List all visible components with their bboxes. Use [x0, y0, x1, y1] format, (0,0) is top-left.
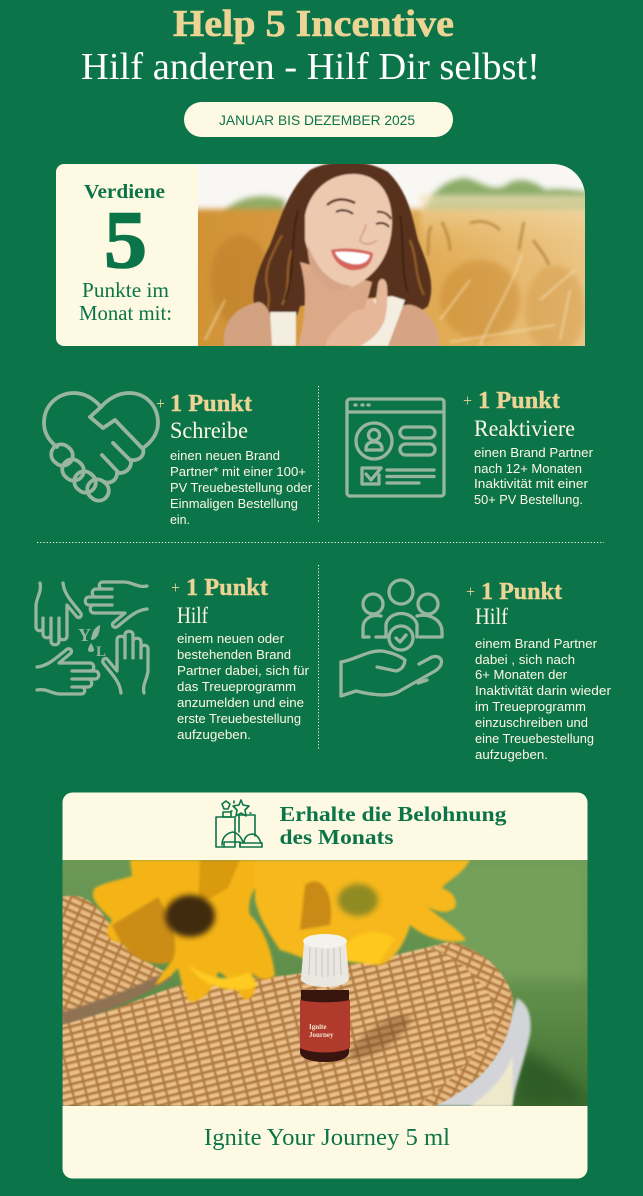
text: description: im Treueprogramm: [475, 699, 586, 714]
icon: people above open hand: [341, 580, 442, 696]
basket lid: left part: [62, 896, 172, 1025]
title: Help 5 Incentive: [173, 3, 454, 45]
text: description: anzumelden und eine: [177, 695, 304, 710]
text: description: einen neuen Brand: [170, 448, 280, 463]
text: description: [474, 445, 594, 507]
text: description: Inaktivität darin wieder: [475, 683, 612, 698]
face: [305, 174, 392, 288]
heading: reward of the month: [280, 802, 507, 849]
text: description: [475, 636, 612, 762]
hand: [325, 279, 387, 346]
points label: +: [156, 394, 165, 413]
neck and chest: [298, 262, 372, 346]
text: description: bestehenden Brand: [177, 647, 291, 662]
heading: Verdiene: Verdiene: [84, 181, 165, 203]
heading: Schreibe: Schreibe: [170, 418, 248, 443]
eyebrows and eyes: [327, 199, 355, 205]
points label: 1 Punkt: [481, 579, 562, 605]
icon: handshake heart: [44, 393, 158, 505]
icon: gifts and stars: [216, 800, 262, 847]
item: reactivate brand partner: [347, 388, 594, 507]
text: Punkte im Monat mit: Punkte im: [82, 278, 169, 302]
text: description: ein.: [170, 512, 190, 527]
points label: 1 Punkt: [170, 391, 252, 417]
text: description: Partner dabei, sich für: [177, 663, 310, 678]
points label: +: [466, 582, 475, 601]
bottle: [300, 934, 350, 1062]
shoulders: [224, 302, 273, 346]
dress: [270, 312, 296, 346]
date pill: JANUAR BIS DEZEMBER 2025: [219, 112, 415, 128]
bottle: Journey: [309, 1031, 334, 1039]
points label: 1 Punkt: [186, 575, 268, 601]
text: Punkte im Monat mit: [79, 278, 172, 325]
heading: Hilf: Hilf: [475, 604, 508, 629]
points label: 1 Punkt: [478, 388, 560, 414]
text: description: PV Treuebestellung oder: [170, 480, 313, 495]
text: description: dabei , sich nach: [475, 652, 575, 667]
hair: [254, 162, 431, 327]
bottle: Ignite: [309, 1023, 326, 1031]
text: description: das Treueprogramm: [177, 679, 296, 694]
panel: earn 5 points hero: [56, 164, 585, 346]
text: description: Einmaligen Bestellung: [170, 496, 298, 511]
subtitle: Hilf anderen - Hilf Dir selbst!: [81, 46, 540, 88]
product name: Ignite Your Journey 5 ml: [204, 1125, 450, 1151]
icon: four hands with logo: L: [96, 644, 106, 660]
basket lid: front part: [62, 942, 513, 1106]
mouth: [331, 249, 373, 270]
text: description: [170, 448, 313, 527]
big number 5: 5: [104, 194, 147, 285]
left flower: [93, 860, 275, 1002]
text: description: erste Treuebestellung: [177, 711, 301, 726]
text: description: 6+ Monaten der: [475, 667, 568, 682]
text: description: Inaktivität mit einer: [474, 476, 589, 491]
heading: reward of the month: des Monats: [280, 825, 394, 849]
text: description: Partner* mit einer 100+: [170, 464, 306, 479]
text: description: einzuschreiben und: [475, 715, 588, 730]
text: description: einem Brand Partner: [475, 636, 598, 651]
sunflowers: [93, 860, 470, 1002]
photo: essential oil bottle on wicker basket: [62, 860, 590, 1106]
text: description: aufzugeben.: [177, 727, 251, 742]
item: help a partner re-enrol: [341, 579, 612, 762]
text: description: 50+ PV Bestellung.: [474, 492, 583, 507]
text: description: nach 12+ Monaten: [474, 461, 582, 476]
date pill: [184, 102, 453, 137]
text: description: [177, 631, 310, 742]
panel: cream text box: [56, 164, 199, 346]
panel: cream card: [62, 792, 588, 1178]
right flower: [255, 860, 470, 965]
panel: monthly reward: [62, 792, 590, 1178]
text: description: einem neuen oder: [177, 631, 285, 646]
points label: +: [463, 391, 472, 410]
heading: Hilf: Hilf: [177, 603, 208, 628]
item: help a new partner enrol: [36, 575, 310, 742]
heading: reward of the month: Erhalte die Belohnung: [280, 802, 507, 826]
heading: Reaktiviere: Reaktiviere: [474, 416, 575, 441]
text: description: eine Treuebestellung: [475, 731, 594, 746]
icon: profile window: [347, 399, 444, 496]
icon: four hands with logo: [36, 582, 148, 694]
text: Punkte im Monat mit: Monat mit:: [79, 301, 172, 325]
item: write a new brand partner: [44, 391, 313, 527]
photo: smiling woman in wheat field: [198, 164, 585, 346]
basket base: [430, 998, 531, 1106]
points label: +: [171, 578, 180, 597]
icon: four hands with logo: Y: [78, 625, 91, 645]
text: description: einen Brand Partner: [474, 445, 594, 460]
nose: [360, 224, 377, 244]
text: description: aufzugeben.: [475, 747, 548, 762]
